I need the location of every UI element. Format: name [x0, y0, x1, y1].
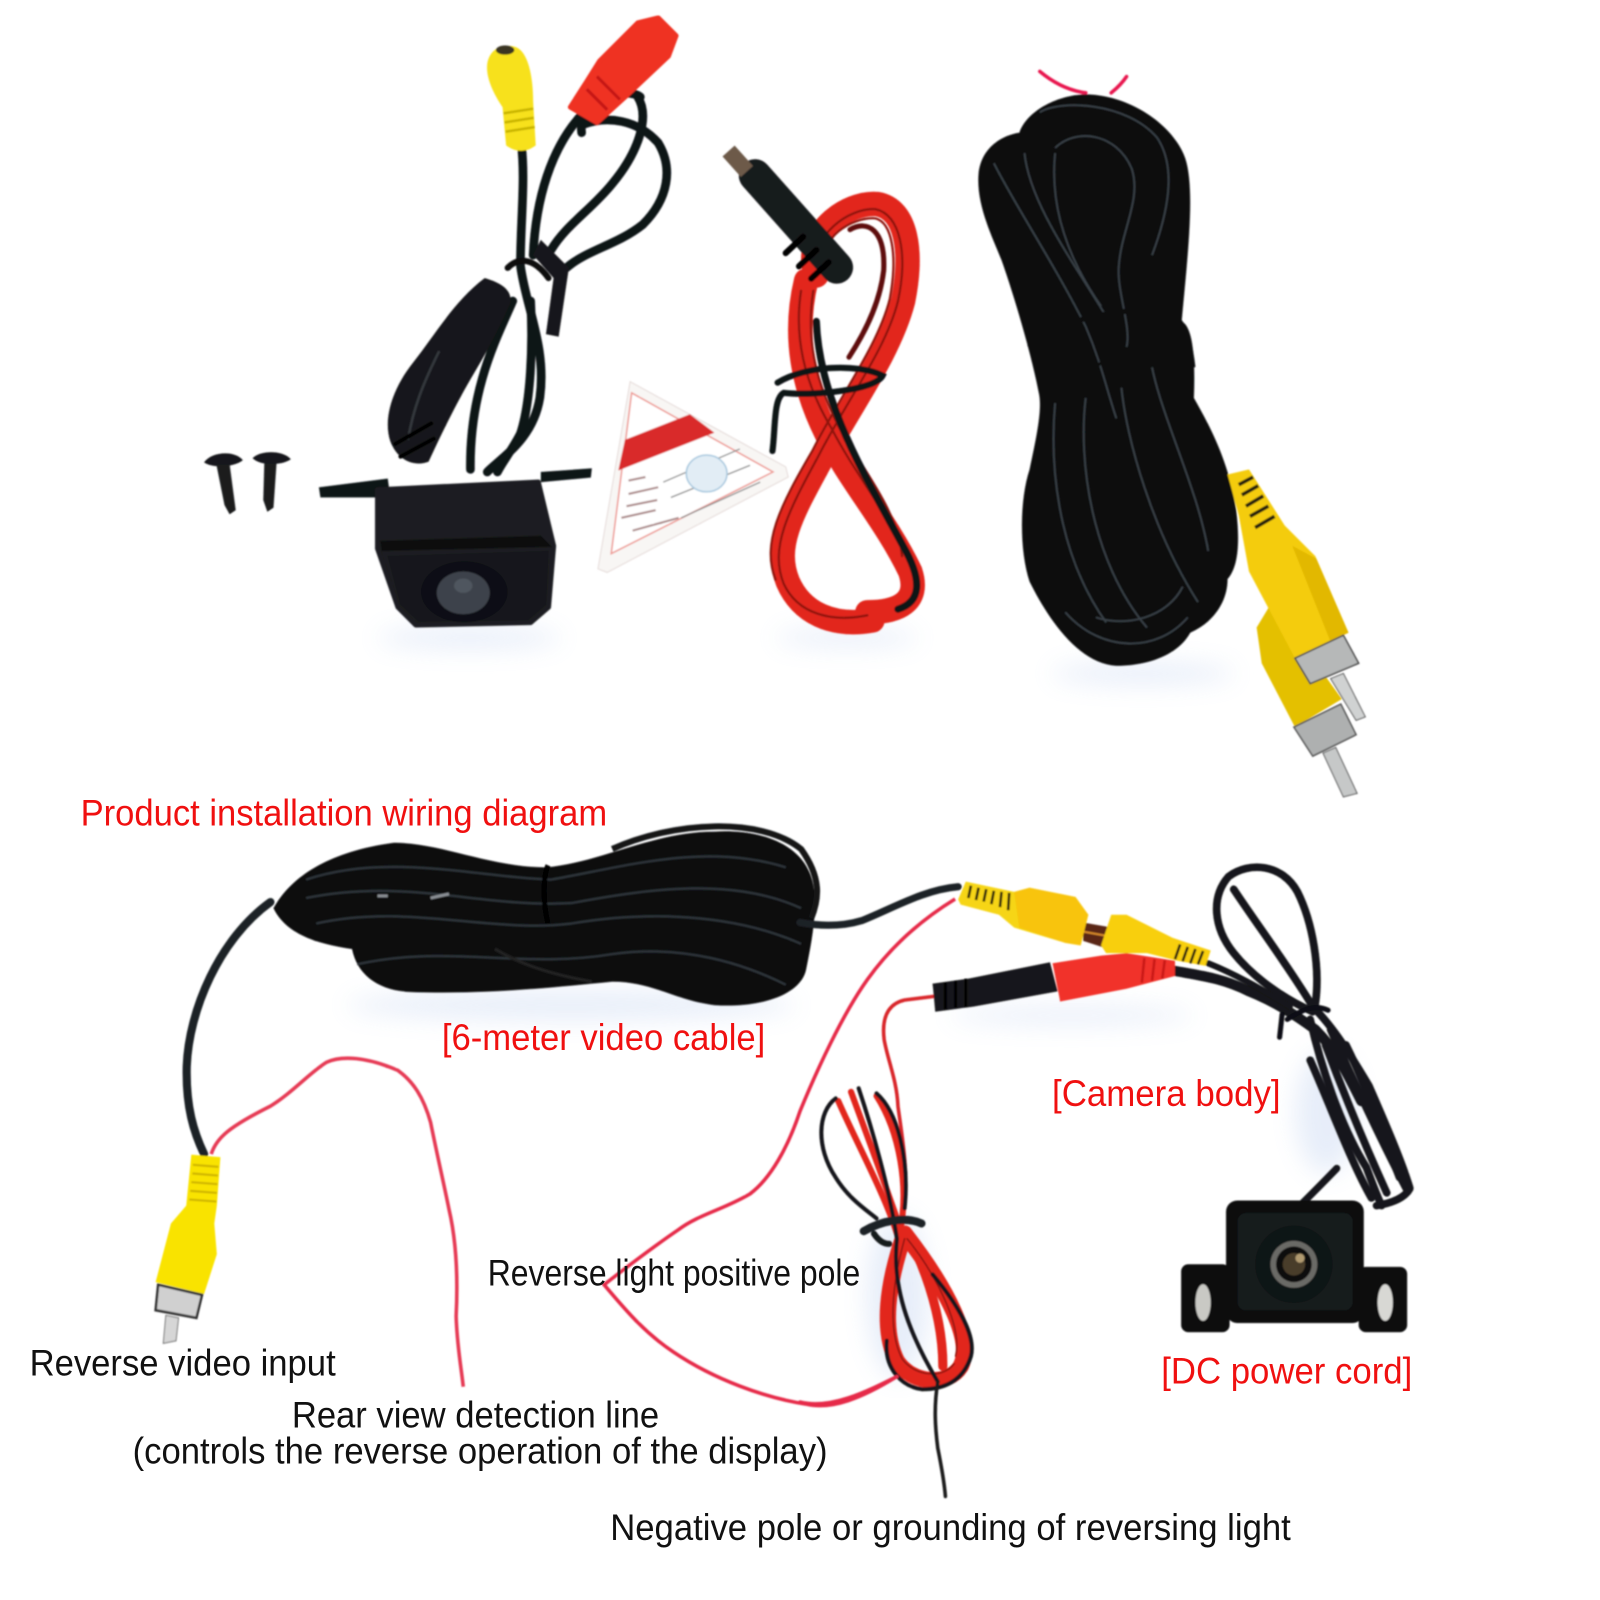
label: rear view detection line: Rear view detection line	[292, 1395, 659, 1436]
icon: red RCA socket	[570, 18, 676, 122]
heading: wiring diagram title: Product installation wiring diagram	[81, 793, 607, 834]
panel: wiring diagram photo	[156, 826, 1410, 1496]
icon: rear camera with mounting flanges	[1181, 1201, 1407, 1332]
label: detection line explanation: (controls the reverse operation of the display)	[133, 1430, 828, 1471]
icon: video cable lead to RCA plug	[187, 887, 958, 1154]
label: 6-meter video cable: [6-meter video cable]	[442, 1017, 765, 1058]
icon: red-black power cable coil	[800, 996, 972, 1496]
icon: camera cables and loop	[1175, 867, 1410, 1206]
label: DC power cord: [DC power cord]	[1161, 1351, 1412, 1392]
icon: reverse light positive wire	[604, 899, 955, 1406]
icon: rear camera, front view	[319, 468, 592, 625]
icon: yellow RCA socket	[487, 45, 536, 151]
icon: rear view detection wire	[211, 1058, 463, 1387]
icon: triangular warranty card	[598, 382, 788, 572]
label: camera body: [Camera body]	[1052, 1073, 1281, 1114]
icon: red power connector pair	[933, 953, 1175, 1012]
label: reverse light positive pole: Reverse light positive pole	[488, 1253, 860, 1294]
icon: camera cables and connectors	[388, 93, 667, 472]
icon: reverse video RCA plug	[156, 1155, 220, 1343]
panel: product parts photo	[204, 18, 1365, 797]
icon: mounting screws	[204, 452, 291, 514]
icon: yellow connector pair	[958, 882, 1211, 966]
soft background shadows	[347, 628, 1357, 1378]
icon: DC power plug and red-black cable	[729, 151, 917, 622]
icon: 6-meter coiled video cable	[978, 71, 1238, 666]
label: negative pole or grounding: Negative pole or grounding of reversing light	[610, 1507, 1291, 1548]
label: reverse video input: Reverse video input	[30, 1343, 336, 1384]
icon: 6-meter video cable coil	[273, 826, 817, 1006]
icon: yellow RCA plugs	[1228, 469, 1365, 797]
